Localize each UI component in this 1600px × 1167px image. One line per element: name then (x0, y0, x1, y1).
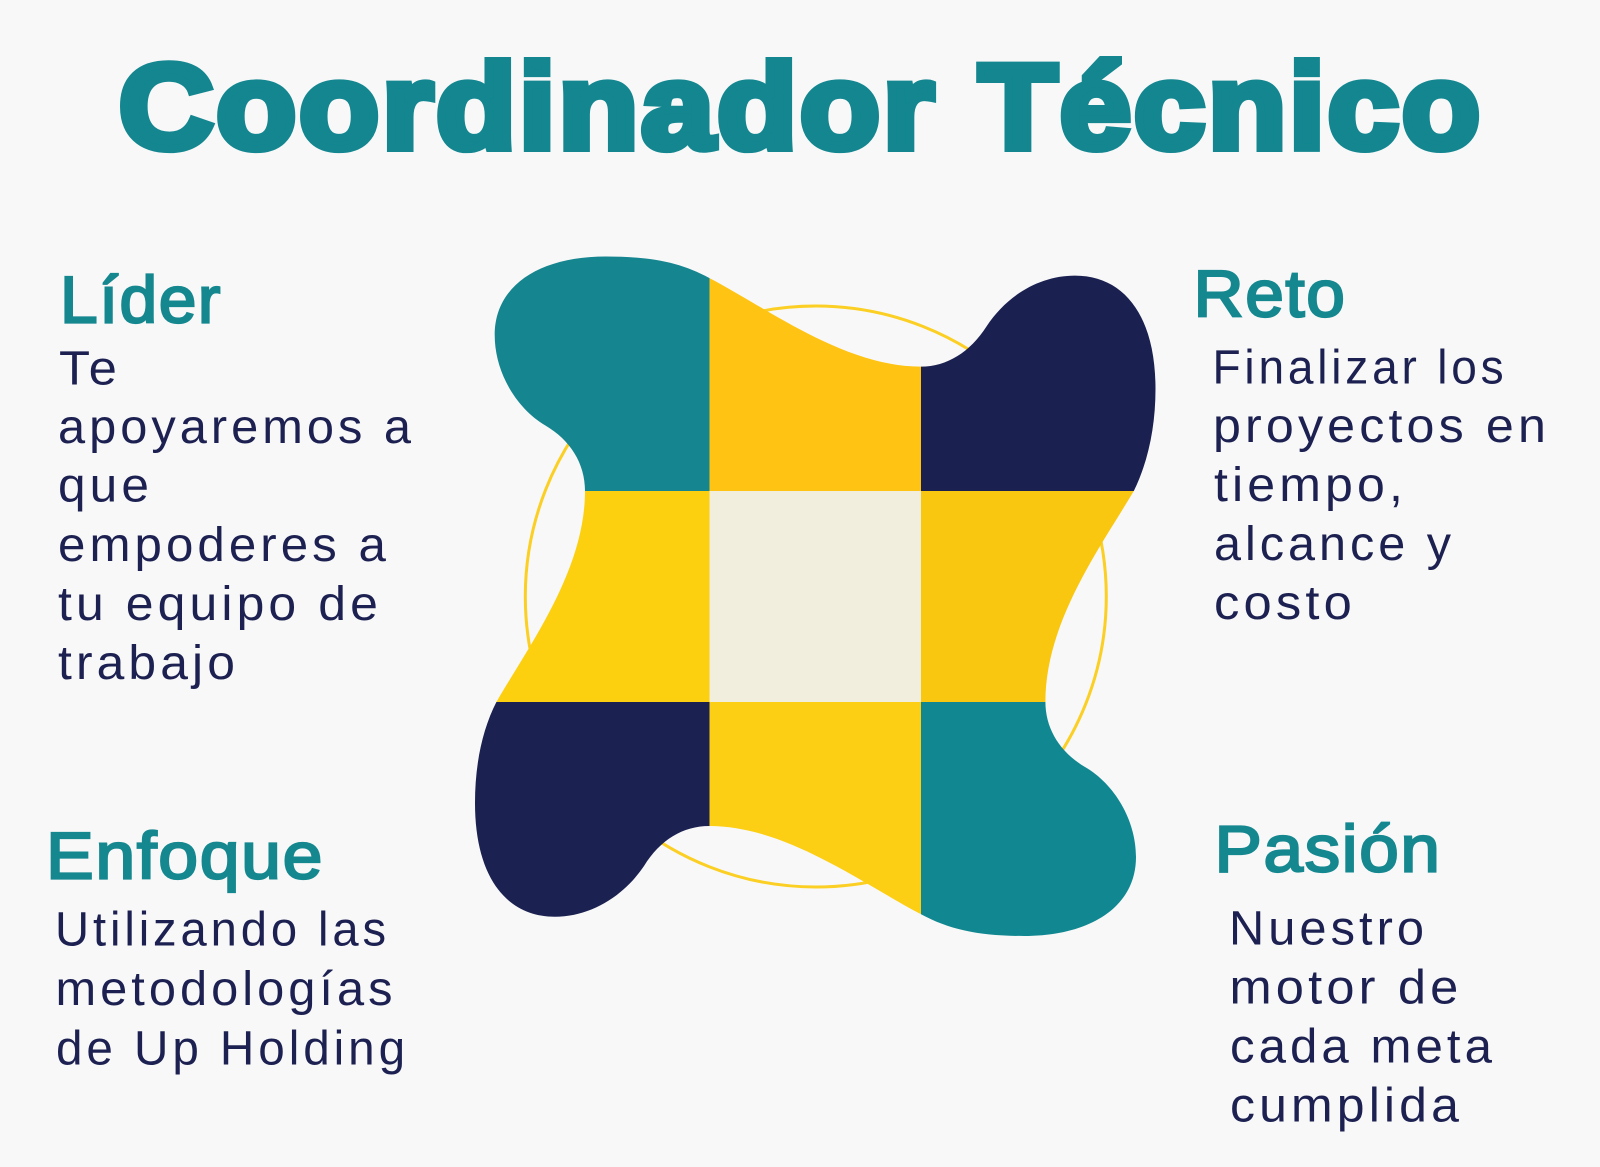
heading: Pasión: Pasión (1214, 812, 1442, 886)
heading: Líder: Líder (60, 263, 222, 337)
heading: Enfoque: Enfoque (46, 818, 324, 892)
title: Coordinador (119, 40, 937, 174)
text block: Reto (1194, 257, 1550, 630)
body: Líder: que (58, 459, 153, 513)
body: Líder (58, 341, 415, 690)
text block: Líder (58, 263, 415, 690)
body: Enfoque: metodologías (56, 962, 396, 1016)
text block: Pasión (1214, 812, 1496, 1133)
body: Reto: proyectos en (1213, 399, 1550, 453)
body: Pasión: cumplida (1230, 1079, 1463, 1133)
checkered blob (460, 240, 1171, 952)
central graphic: ring and checkered blob (460, 240, 1171, 952)
heading: Reto: Reto (1194, 257, 1346, 331)
body: Reto: costo (1214, 576, 1356, 630)
body: Líder: apoyaremos a (58, 400, 415, 454)
body: Reto: alcance y (1214, 517, 1455, 571)
body: Enfoque (55, 903, 409, 1075)
body: Líder: Te (59, 341, 121, 395)
title (119, 40, 1483, 174)
body: Reto (1212, 340, 1550, 630)
body: Líder: trabajo (58, 636, 239, 690)
body: Pasión: Nuestro (1229, 901, 1428, 955)
body: Líder: tu equipo de (58, 577, 382, 631)
body: Reto: tiempo, (1214, 458, 1407, 512)
body: Enfoque: Utilizando las (55, 903, 390, 957)
text block: Enfoque (46, 818, 409, 1075)
body: Pasión: motor de (1230, 960, 1462, 1014)
body: Líder: empoderes a (58, 518, 390, 572)
body: Pasión: cada meta (1230, 1020, 1496, 1074)
body: Reto: Finalizar los (1212, 340, 1508, 394)
body: Pasión (1229, 901, 1496, 1133)
yellow ring (525, 306, 1106, 887)
title: Técnico (979, 40, 1483, 174)
body: Enfoque: de Up Holding (56, 1021, 409, 1075)
